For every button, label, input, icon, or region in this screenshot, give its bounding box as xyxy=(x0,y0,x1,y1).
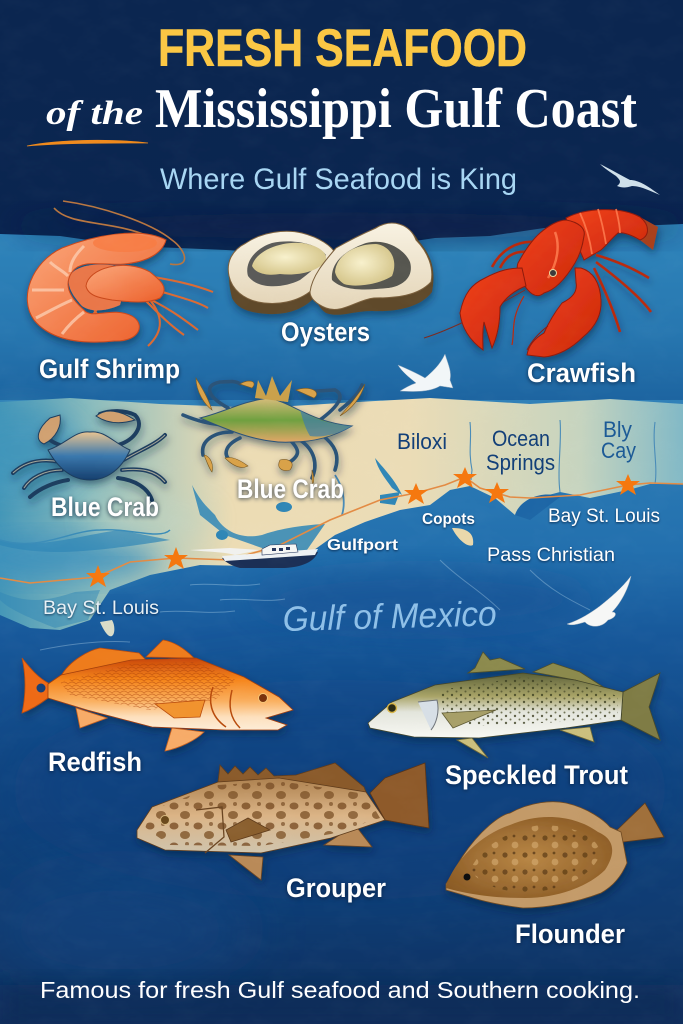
creature and fish labels: Redfish xyxy=(48,747,142,777)
shrimp curled body xyxy=(27,233,166,342)
crab legs xyxy=(183,382,362,478)
crawfish tail xyxy=(566,210,648,260)
seagull middle xyxy=(398,354,453,391)
map place labels: Bly xyxy=(603,417,632,442)
crab claw tips xyxy=(196,378,365,416)
crawfish illustration xyxy=(424,209,658,357)
crab spines xyxy=(255,376,292,402)
background: navy sky xyxy=(0,0,683,300)
flounder eye xyxy=(464,874,470,880)
subtitle: Where Gulf Seafood is King xyxy=(160,163,517,196)
map place labels: Copots xyxy=(422,511,475,528)
shrimp segments xyxy=(32,246,84,334)
creature and fish labels: Grouper xyxy=(286,873,386,903)
background: upper blue band xyxy=(0,224,683,420)
grouper body xyxy=(137,778,385,853)
map water details: bays, lagoons and rivers xyxy=(0,458,560,636)
map place labels xyxy=(43,417,660,619)
crawfish tail fan xyxy=(640,217,658,250)
blue crab left xyxy=(13,411,165,500)
creature and fish labels: Gulf Shrimp xyxy=(39,354,180,384)
creature and fish labels: Oysters xyxy=(281,317,370,347)
seagull over gulf xyxy=(567,576,631,626)
title line 1: FRESH SEAFOOD xyxy=(158,19,527,78)
boat xyxy=(190,544,318,568)
redfish illustration xyxy=(22,640,293,751)
map place labels: Bay St. Louis xyxy=(43,598,159,619)
crawfish tail segments xyxy=(548,209,620,278)
map route: orange highway line xyxy=(0,477,683,583)
trout gill, fin, eye xyxy=(418,700,438,730)
gulf of mexico label: Gulf of Mexico xyxy=(282,594,497,639)
flounder tail xyxy=(615,803,664,842)
flounder illustration xyxy=(446,802,664,908)
footer tagline: Famous for fresh Gulf seafood and Southern cooking. xyxy=(40,977,640,1003)
shrimp antennae xyxy=(54,201,185,265)
map location stars xyxy=(86,467,640,587)
crab shell blue right xyxy=(300,410,352,437)
crawfish right claw xyxy=(527,268,601,357)
creature and fish labels: Speckled Trout xyxy=(445,760,628,790)
trout spots xyxy=(440,677,618,726)
icon: seagull top right xyxy=(600,164,660,195)
grouper illustration xyxy=(137,763,429,880)
crawfish legs and antennae xyxy=(424,242,651,345)
redfish fins xyxy=(61,640,194,676)
title line 2: of the xyxy=(46,95,143,132)
redfish body xyxy=(48,658,293,730)
flounder body xyxy=(446,817,612,898)
trout fins xyxy=(468,652,608,690)
crab claws xyxy=(38,415,60,444)
creature and fish labels: Flounder xyxy=(515,919,625,949)
right oyster xyxy=(310,223,433,315)
rivers xyxy=(0,420,656,544)
crawfish eye xyxy=(550,270,556,276)
redfish eye spot and eye xyxy=(36,684,46,692)
background: watercolor tonal washes xyxy=(0,212,683,1024)
second shrimp body xyxy=(86,265,164,302)
map place labels: Cay xyxy=(601,438,636,463)
crawfish carapace xyxy=(517,220,584,296)
blue crab center xyxy=(183,376,365,483)
wave highlights xyxy=(40,560,590,650)
creature and fish labels: Blue Crab xyxy=(51,492,159,522)
gulf shrimp illustration xyxy=(27,201,213,346)
grouper gill, fin, eye xyxy=(196,807,224,853)
trout body xyxy=(368,673,623,738)
background: coastal land xyxy=(0,398,683,630)
crab shell xyxy=(48,432,130,480)
map place labels: Gulfport xyxy=(327,537,399,554)
orange swoosh underline xyxy=(27,140,148,146)
title line 2: Mississippi Gulf Coast xyxy=(155,78,637,140)
crab leg highlights xyxy=(13,435,165,488)
flounder fin rim xyxy=(446,802,627,908)
grouper mottling xyxy=(145,781,380,846)
creature and fish labels: Crawfish xyxy=(527,358,636,388)
crab pincers xyxy=(204,455,314,483)
creature and fish labels xyxy=(39,317,636,949)
crab shell xyxy=(200,398,352,442)
map place labels: Pass Christian xyxy=(487,545,615,566)
background: gulf water xyxy=(0,400,683,1024)
map place labels: Springs xyxy=(486,450,555,475)
map place labels: Ocean xyxy=(492,426,550,451)
shrimp center fill xyxy=(69,265,130,310)
map place labels: Biloxi xyxy=(397,429,447,454)
crab legs xyxy=(13,411,165,500)
shrimp head highlight xyxy=(93,234,157,252)
left oyster xyxy=(228,231,336,314)
shrimp legs xyxy=(88,275,213,346)
crawfish left claw xyxy=(460,268,526,350)
speckled trout illustration xyxy=(368,652,660,758)
redfish gill and pectoral xyxy=(211,687,226,727)
map place labels: Bay St. Louis xyxy=(548,506,660,527)
redfish scales xyxy=(60,662,236,710)
flounder mottling xyxy=(470,825,600,892)
creature and fish labels: Blue Crab xyxy=(237,474,344,504)
grouper fins xyxy=(218,763,366,792)
oysters illustration xyxy=(228,223,433,315)
